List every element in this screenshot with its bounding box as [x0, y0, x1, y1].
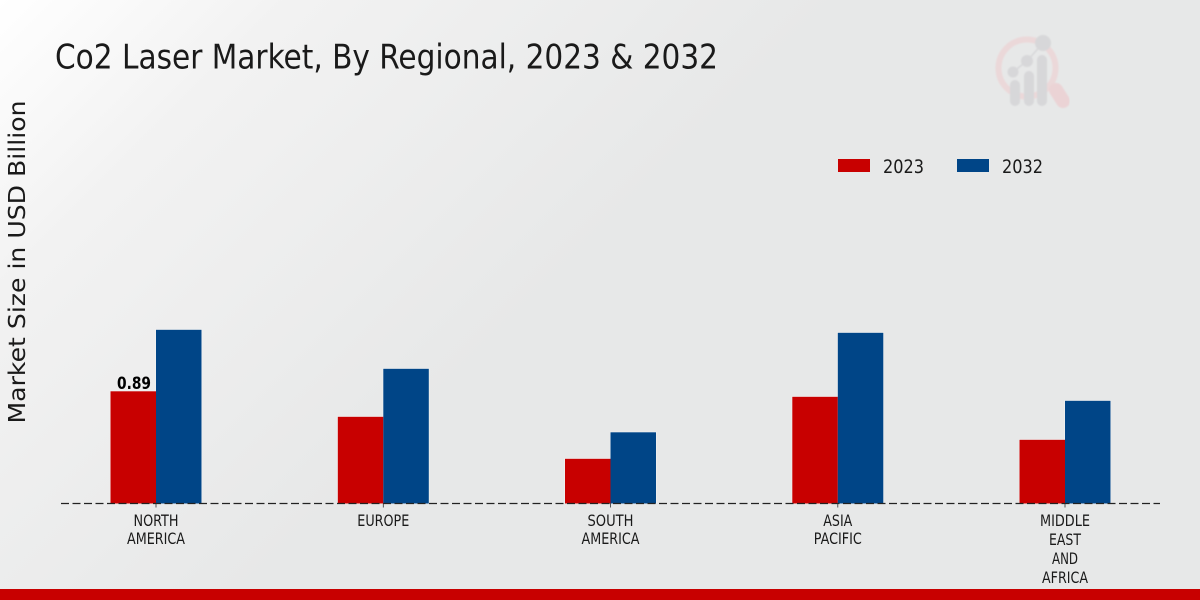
x axis label: Middle East and Africa: AFRICA — [1042, 568, 1088, 587]
x axis label: Middle East and Africa: AND — [1052, 549, 1078, 568]
x axis label: Europe: EUROPE — [357, 511, 409, 530]
Europe bars — [338, 369, 429, 504]
x axis label: North America: AMERICA — [127, 529, 185, 548]
x axis label: Middle East and Africa: MIDDLE — [1040, 511, 1090, 530]
x axis label: Asia Pacific: PACIFIC — [814, 529, 862, 548]
x axis label: Asia Pacific — [814, 511, 862, 548]
legend swatch 2023 — [838, 159, 870, 172]
Asia Pacific bars — [792, 333, 883, 504]
legend swatch 2032 — [957, 159, 989, 172]
y axis label: Market Size in USD Billion — [5, 100, 31, 424]
x axis label: North America — [127, 511, 185, 548]
icon: watermark logo — [998, 35, 1063, 106]
baseline — [61, 502, 1160, 504]
legend label 2023: 2023 — [883, 156, 924, 178]
x axis label: Asia Pacific: ASIA — [823, 511, 852, 530]
legend — [838, 156, 1043, 178]
North America bars — [110, 330, 202, 504]
value label: 0.89 — [117, 374, 151, 393]
x axis label: Middle East and Africa — [1040, 511, 1090, 587]
legend label 2032: 2032 — [1002, 156, 1043, 178]
x axis label: North America: NORTH — [134, 511, 178, 530]
x axis label: South America — [582, 511, 640, 548]
x axis label: South America: SOUTH — [588, 511, 634, 530]
South America bars — [565, 432, 656, 504]
x axis label: South America: AMERICA — [582, 529, 640, 548]
Middle East and Africa bars — [1020, 401, 1110, 504]
footer bar — [0, 589, 1200, 600]
bar chart — [61, 330, 1160, 508]
x axis label: Middle East and Africa: EAST — [1049, 530, 1081, 549]
title: Co2 Laser Market, By Regional, 2023 & 2032 — [55, 38, 718, 78]
